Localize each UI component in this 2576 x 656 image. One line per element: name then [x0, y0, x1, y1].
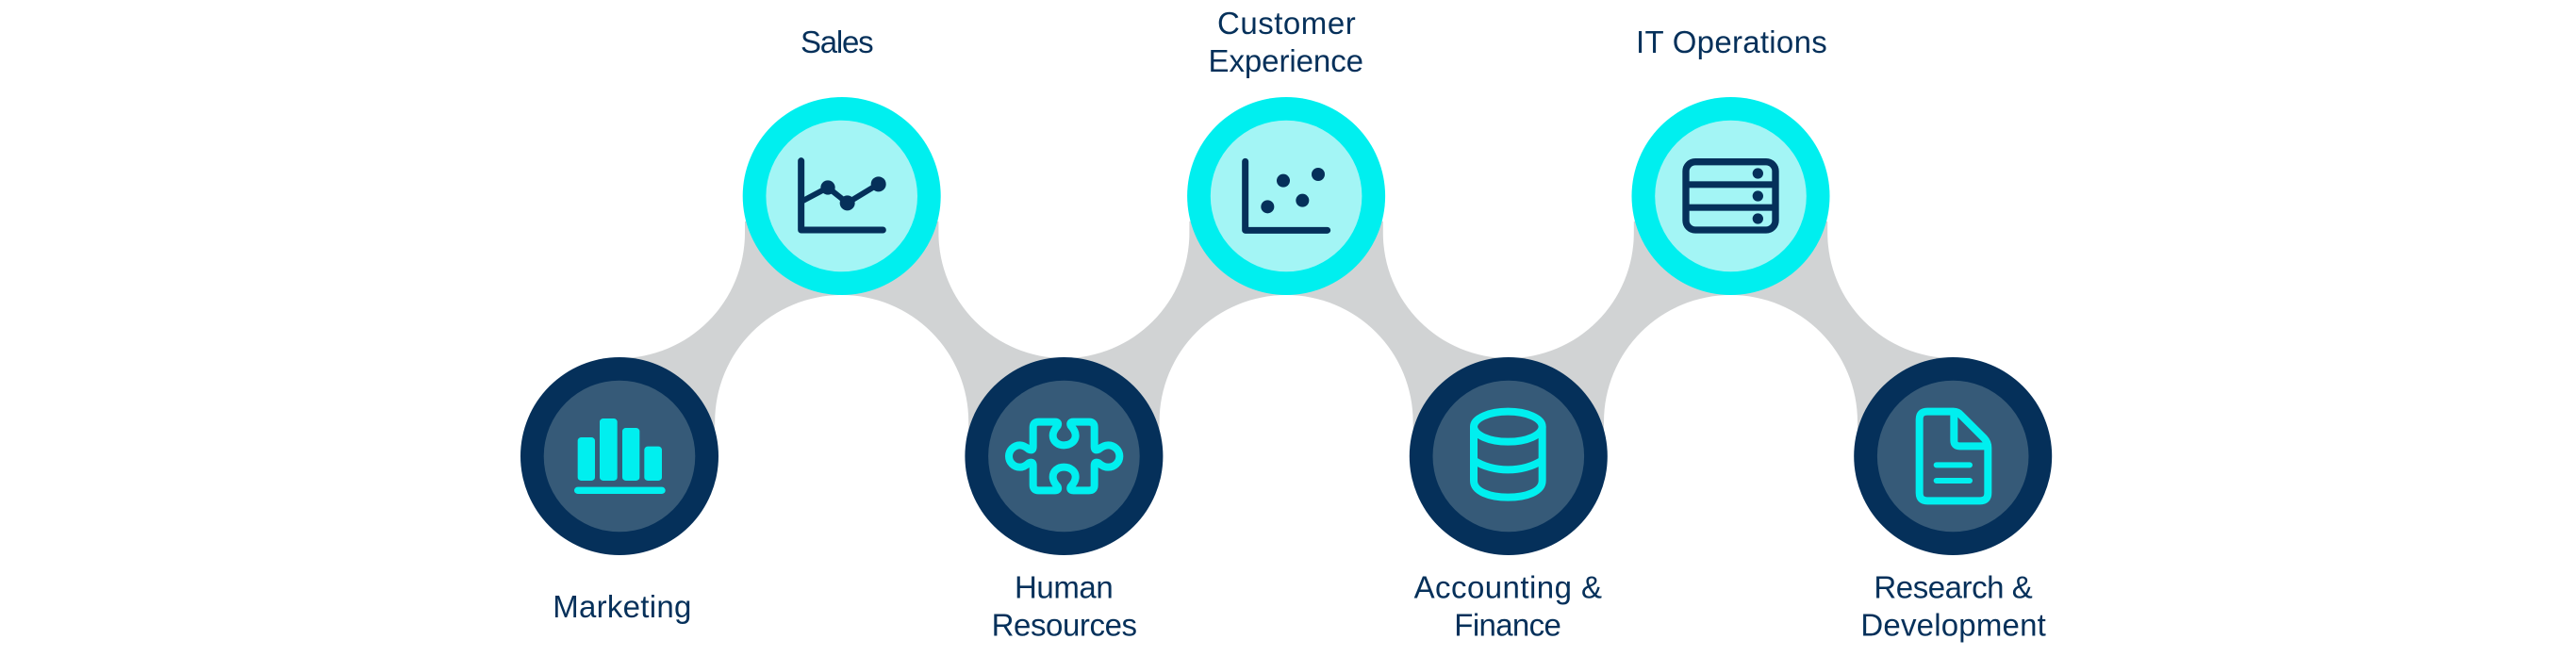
- label: Accounting & Finance: Finance: [1454, 607, 1561, 643]
- label: Accounting & Finance: [1414, 569, 1602, 643]
- icon: scatter plot: [1246, 161, 1328, 230]
- icon: bar chart: [574, 418, 666, 494]
- label: Customer Experience: Experience: [1209, 43, 1363, 78]
- node: IT Operations: [1631, 97, 1829, 295]
- icon: document: [1920, 412, 1988, 500]
- node: Marketing: [520, 357, 718, 555]
- label: Customer Experience: Customer: [1217, 6, 1356, 41]
- label: Research & Development: [1860, 569, 2046, 643]
- node: Accounting & Finance: [1410, 357, 1608, 555]
- label: Research & Development: Research &: [1874, 569, 2033, 605]
- node: Sales: [743, 97, 941, 295]
- label: Sales: Sales: [801, 25, 874, 59]
- label: Human Resources: [992, 569, 1137, 643]
- node: Research & Development: [1854, 357, 2052, 555]
- label: Accounting & Finance: Accounting &: [1414, 569, 1602, 605]
- icon: server rack: [1686, 162, 1775, 230]
- icon: line chart: [801, 161, 886, 230]
- label: Human Resources: Human: [1015, 569, 1114, 605]
- label: Human Resources: Resources: [992, 607, 1137, 643]
- node: Human Resources: [965, 357, 1163, 555]
- label: Marketing: Marketing: [553, 589, 691, 624]
- icon: puzzle piece: [1009, 422, 1119, 490]
- grey wave connectors: [619, 196, 1953, 456]
- node: Customer Experience: [1187, 97, 1385, 295]
- label: Research & Development: Development: [1860, 607, 2046, 643]
- label: Customer Experience: [1209, 6, 1363, 78]
- icon: database: [1474, 412, 1543, 498]
- label: IT Operations: IT Operations: [1636, 25, 1827, 59]
